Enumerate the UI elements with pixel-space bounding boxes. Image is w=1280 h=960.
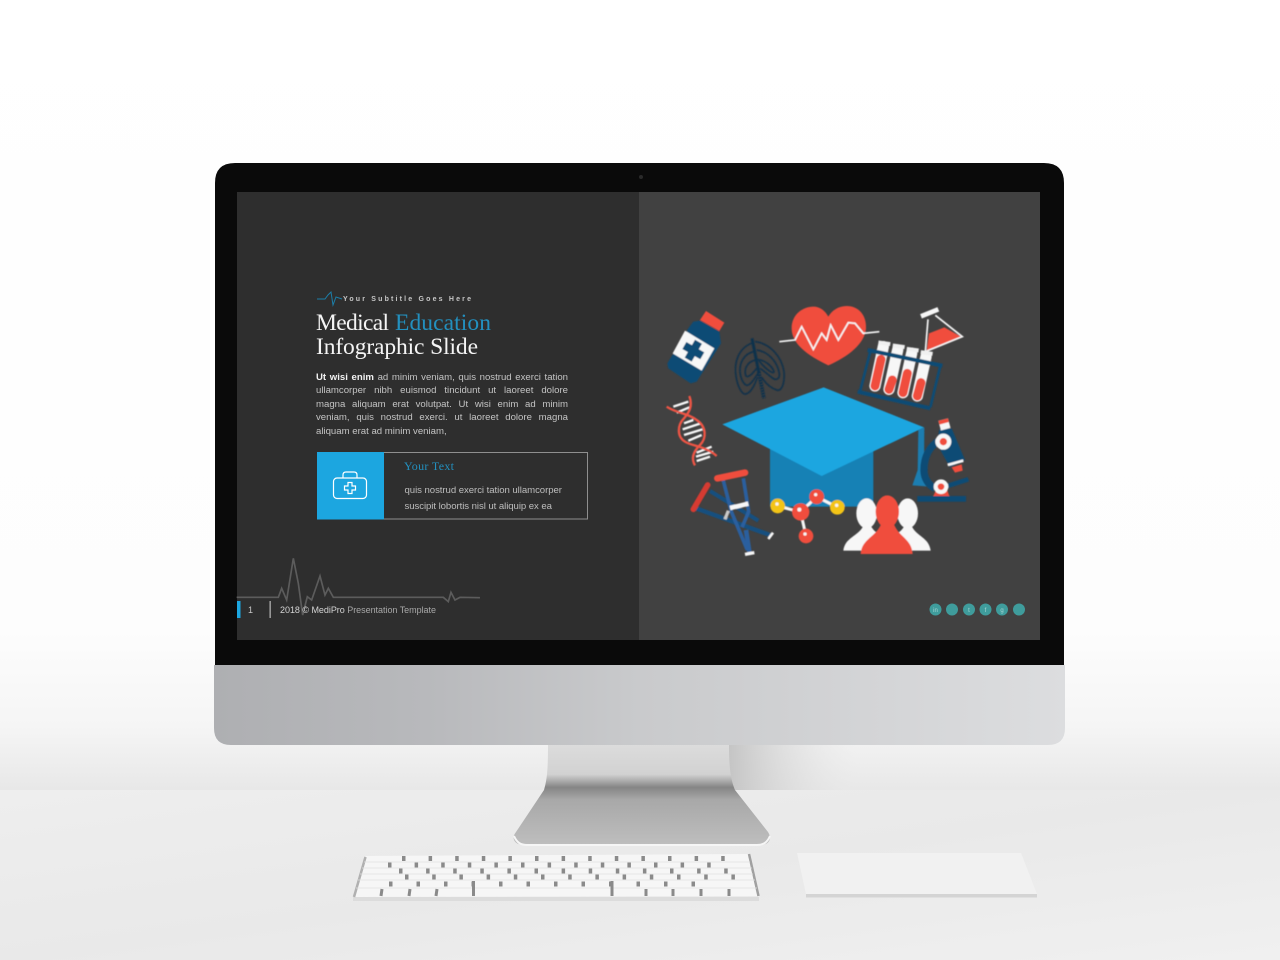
social icons: t bbox=[968, 608, 970, 614]
icon: medical case bbox=[334, 472, 366, 498]
monitor stand bbox=[514, 744, 770, 845]
social icons: g bbox=[1000, 608, 1004, 614]
icon: flask bbox=[921, 309, 962, 352]
title: Education bbox=[395, 310, 491, 336]
social icons: in bbox=[933, 608, 938, 614]
icon: DNA helix bbox=[667, 396, 717, 465]
footer divider bbox=[270, 601, 271, 618]
callout text: suscipit lobortis nisl ut aliquip ex ea bbox=[404, 501, 553, 512]
body paragraph: ullamcorper nibh euismod tincidunt ut laoreet dolore bbox=[316, 385, 568, 396]
body paragraph: veniam, quis nostrud exerci. ut laoreet dolore magna bbox=[316, 412, 568, 423]
callout heading: Your Text bbox=[404, 459, 455, 473]
icon: test tube rack bbox=[858, 341, 942, 408]
icon: heart with pulse bbox=[779, 306, 879, 365]
subtitle: Your Subtitle Goes Here bbox=[343, 296, 471, 303]
body paragraph bbox=[316, 372, 568, 436]
callout text bbox=[404, 485, 563, 512]
body paragraph: magna aliquam erat volutpat. Ut wisi enim ad minim bbox=[316, 398, 568, 410]
slide: right panel bbox=[639, 192, 1040, 640]
icon: microscope bbox=[917, 418, 968, 502]
monitor chin bbox=[214, 665, 1065, 745]
title bbox=[316, 310, 491, 360]
icon: molecule bbox=[770, 489, 845, 543]
callout box bbox=[317, 452, 588, 520]
footer bbox=[237, 601, 436, 618]
keyboard bbox=[353, 854, 759, 901]
page marker bbox=[237, 601, 240, 618]
social icons bbox=[930, 604, 1025, 616]
title: Infographic Slide bbox=[316, 334, 478, 360]
medical education illustration bbox=[667, 306, 968, 554]
social icons: f bbox=[985, 608, 987, 614]
icon: ribcage bbox=[735, 338, 784, 398]
heartbeat line bbox=[237, 558, 480, 615]
copyright: 2018 © MediPro Presentation Template bbox=[280, 605, 436, 615]
icon: medicine bottle bbox=[667, 311, 724, 383]
webcam bbox=[639, 175, 643, 179]
page number: 1 bbox=[248, 605, 253, 615]
icon: crutches bbox=[693, 473, 773, 554]
title: Medical bbox=[316, 310, 389, 336]
trackpad bbox=[797, 853, 1037, 898]
icon: people group bbox=[843, 495, 931, 554]
slide: left panel bbox=[237, 192, 639, 640]
body paragraph: Ut wisi enim ad minim veniam, quis nostrud exerci tation bbox=[316, 372, 568, 382]
callout text: quis nostrud exerci tation ullamcorper bbox=[404, 485, 563, 496]
cap tassel bbox=[912, 427, 929, 487]
monitor bezel bbox=[215, 163, 1064, 665]
icon: graduation cap bbox=[722, 387, 929, 507]
body paragraph: aliquam erat ad minim veniam, bbox=[316, 426, 447, 436]
subtitle pulse icon bbox=[317, 292, 342, 305]
